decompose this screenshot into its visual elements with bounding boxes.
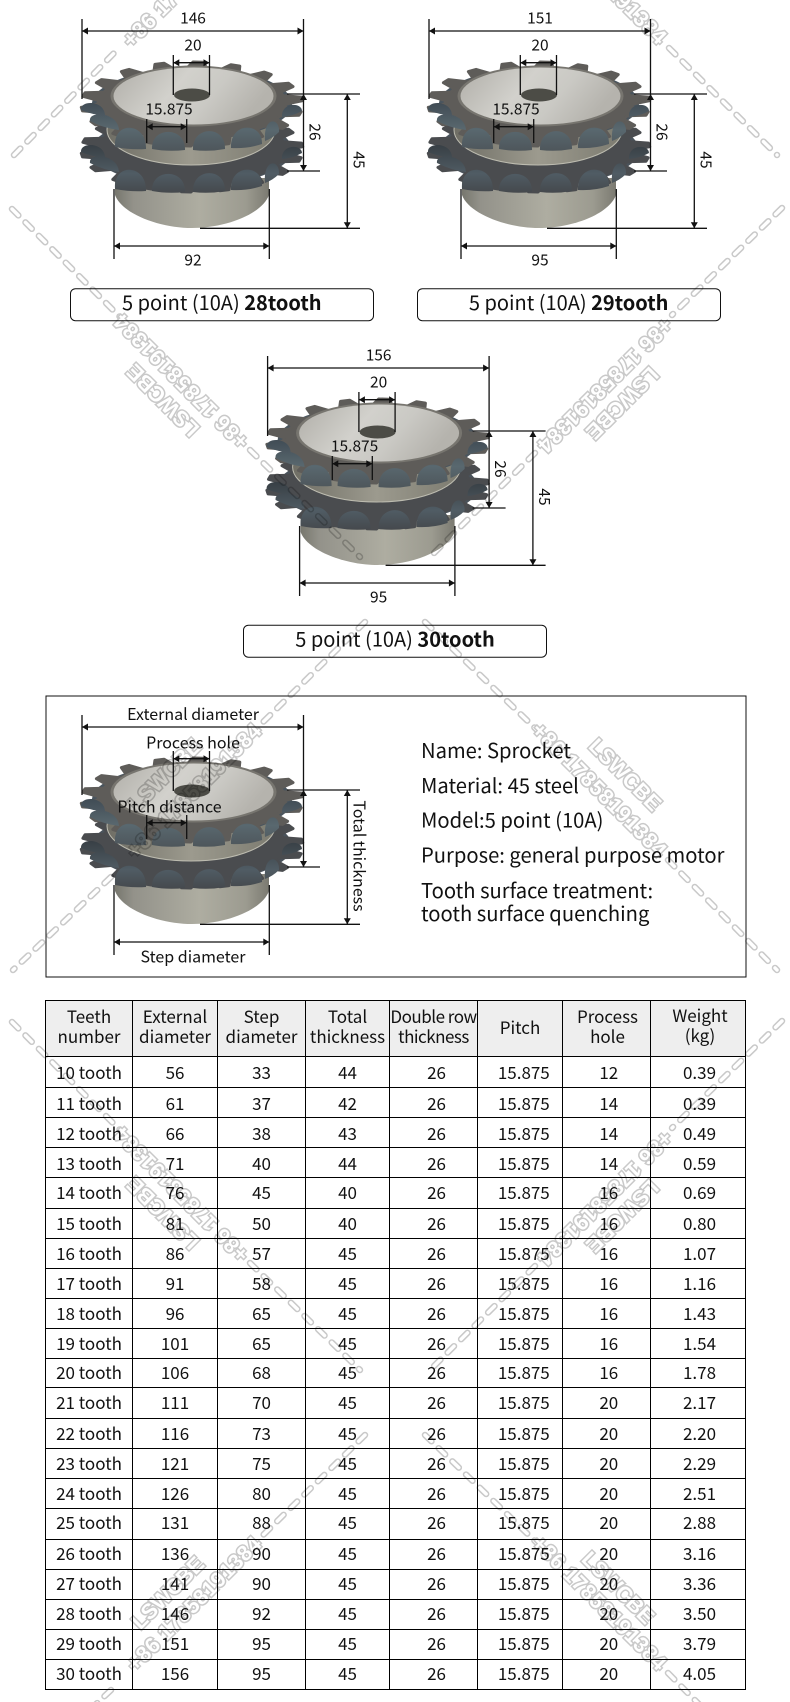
specification table: 26: [427, 1179, 446, 1204]
dimension lines 28 tooth: [82, 19, 360, 259]
dimension labels 29 tooth: [492, 6, 718, 271]
specification table: [45, 1000, 746, 1690]
sprocket photo 30 tooth: [267, 399, 488, 565]
specification table: 15.875: [498, 1240, 550, 1264]
specification table: 0.59: [683, 1150, 716, 1174]
specification table: 45: [338, 1420, 357, 1444]
watermark phone numbers: +86 17858191384: [122, 1532, 266, 1676]
specification table: 45: [338, 1630, 357, 1654]
specification table: 26: [427, 1150, 446, 1174]
specification table: 3.50: [683, 1600, 716, 1624]
sprocket photo 29 tooth: [428, 62, 650, 228]
specification table: 15.875: [498, 1540, 550, 1564]
specification table: 15 tooth: [56, 1210, 122, 1234]
watermark brand names: LSWCBE: [122, 359, 204, 441]
dimension lines: [82, 715, 360, 955]
dimension names: Step diameter: [141, 944, 246, 968]
specification table: 44: [338, 1150, 357, 1174]
specification table: 45: [338, 1660, 357, 1684]
caption: 29 tooth: 5 point (10A) 29tooth: [469, 287, 668, 316]
dimension names: Process hole: [146, 730, 240, 754]
specification table: 121: [161, 1450, 189, 1474]
specification table: 126: [161, 1480, 189, 1504]
dimension names: Pitch distance: [117, 794, 222, 818]
specification table: Weight: [672, 1002, 728, 1027]
specification table: 70: [252, 1389, 271, 1414]
specification table: 141: [161, 1570, 189, 1594]
watermark brand names: LSWCBE: [581, 1175, 663, 1257]
specification table: 20 tooth: [56, 1359, 122, 1384]
dimension labels 29 tooth: 26: [652, 123, 674, 141]
specification table: 20: [599, 1480, 618, 1504]
specification table: 18 tooth: [56, 1300, 122, 1324]
specification table: 26: [427, 1660, 446, 1684]
product attributes: Model:5 point (10A): [421, 805, 603, 834]
specification table: 45: [338, 1540, 357, 1564]
specification table: 25 tooth: [56, 1509, 122, 1534]
specification table: 15.875: [498, 1270, 550, 1294]
specification table: 20: [599, 1630, 618, 1654]
dimension labels 28 tooth: 45: [348, 151, 370, 169]
specification table: External: [143, 1003, 207, 1028]
watermark brand names: LSWCBE: [581, 362, 663, 444]
specification table: 65: [252, 1330, 271, 1354]
specification table: 0.39: [683, 1090, 716, 1114]
specification table: 45: [338, 1300, 357, 1324]
sprocket photo: [81, 758, 303, 924]
specification table: 96: [166, 1300, 184, 1324]
specification table: 14: [599, 1090, 618, 1114]
specification table: 3.16: [683, 1540, 716, 1564]
dimension labels 28 tooth: 20: [184, 34, 202, 56]
specification table: 45: [338, 1330, 357, 1354]
specification table: 26: [427, 1210, 446, 1234]
specification table: 45: [338, 1600, 357, 1624]
specification table: 20: [599, 1509, 618, 1534]
specification table: diameter: [139, 1023, 211, 1048]
specification table: 21 tooth: [56, 1389, 122, 1414]
specification table: 26: [427, 1540, 446, 1564]
specification table: 45: [338, 1359, 357, 1384]
dimension names: External diameter: [127, 701, 260, 725]
specification table: 71: [166, 1150, 184, 1174]
specification table: 58: [252, 1270, 271, 1294]
dimension lines 29 tooth: [429, 19, 707, 259]
specification table: 75: [252, 1450, 271, 1474]
specification table: 40: [338, 1179, 357, 1204]
specification table: 15.875: [498, 1630, 550, 1654]
specification table: 15.875: [498, 1300, 550, 1324]
dimension labels 28 tooth: [145, 6, 370, 271]
specification table: 90: [252, 1570, 271, 1594]
sprocket photo 28 tooth: [81, 62, 303, 228]
specification table: 95: [252, 1630, 271, 1654]
specification table: Process: [577, 1002, 638, 1028]
specification table: 15.875: [498, 1210, 550, 1234]
watermark phone numbers: +86 17858191384: [533, 313, 677, 457]
specification table: number: [58, 1023, 120, 1048]
watermark brand names: LSWCBE: [577, 1547, 659, 1629]
specification table: 44: [338, 1059, 357, 1084]
specification table: 15.875: [498, 1509, 550, 1534]
dimension labels 29 tooth: 151: [527, 6, 553, 28]
specification table: 1.16: [683, 1270, 716, 1294]
specification table: 22 tooth: [56, 1420, 122, 1444]
watermark brand names: [122, 359, 666, 1634]
dimension labels 30 tooth: 15.875: [331, 435, 378, 457]
specification table: 40: [338, 1210, 357, 1234]
watermark brand names: LSWCBE: [127, 1552, 209, 1634]
dimension labels 29 tooth: 15.875: [492, 98, 540, 120]
dimension labels 28 tooth: 146: [180, 6, 206, 28]
specification table: 20: [599, 1389, 618, 1414]
caption: 30 tooth: 5 point (10A) 30tooth: [295, 624, 495, 652]
specification table: 68: [252, 1359, 271, 1384]
specification table: 45: [252, 1179, 271, 1204]
specification table: 33: [252, 1059, 271, 1084]
specification table: Double row: [390, 1003, 477, 1028]
dimension names: Total thickness: [348, 800, 372, 912]
specification table: 20: [599, 1420, 618, 1444]
dimension labels 30 tooth: 45: [534, 488, 556, 506]
specification table: 26: [427, 1509, 446, 1534]
panel frame: [46, 696, 746, 977]
specification table: thickness: [398, 1023, 469, 1048]
specification table: 15.875: [498, 1090, 550, 1114]
specification table: 131: [161, 1509, 189, 1534]
specification table: 3.79: [683, 1630, 716, 1654]
specification table: 101: [161, 1330, 189, 1354]
watermark phone numbers: +86 17858191384: [109, 1122, 254, 1267]
drawing: 29 tooth sprocket: [428, 6, 718, 271]
specification table: 0.80: [683, 1210, 716, 1234]
specification table: 16: [599, 1300, 618, 1324]
specification table: Pitch: [500, 1014, 540, 1039]
specification table: 45: [338, 1570, 357, 1594]
specification table: 81: [166, 1210, 184, 1234]
specification table: 20: [599, 1600, 618, 1624]
caption: 30 tooth: [244, 624, 546, 657]
specification table: 16: [599, 1270, 618, 1294]
specification table: 26: [427, 1389, 446, 1414]
specification table: 26: [427, 1270, 446, 1294]
specification table: 26: [427, 1240, 446, 1264]
product attributes: tooth surface quenching: [421, 898, 650, 927]
specification table: 13 tooth: [56, 1150, 122, 1174]
specification table: 2.29: [683, 1450, 716, 1474]
specification table: 45: [338, 1389, 357, 1414]
specification table: 16: [599, 1240, 618, 1264]
specification table: 11 tooth: [56, 1090, 122, 1114]
specification table: 16: [599, 1330, 618, 1354]
specification table: 37: [252, 1090, 271, 1114]
specification table: 15.875: [498, 1330, 550, 1354]
dimension labels 30 tooth: 156: [366, 344, 392, 366]
specification table: 106: [161, 1359, 189, 1384]
specification table: 151: [161, 1630, 189, 1654]
product attributes: Purpose: general purpose motor: [421, 840, 725, 869]
specification table: 45: [338, 1450, 357, 1474]
dimension labels 28 tooth: 26: [304, 123, 326, 141]
specification table: 91: [166, 1270, 184, 1294]
specification table: 15.875: [498, 1150, 550, 1174]
specification table: 3.36: [683, 1570, 716, 1594]
specification table: 15.875: [498, 1660, 550, 1684]
specification table: 28 tooth: [56, 1600, 122, 1624]
specification table: 146: [161, 1600, 189, 1624]
specification table: 20: [599, 1450, 618, 1474]
specification table: 14: [599, 1120, 618, 1144]
specification table: diameter: [226, 1023, 297, 1048]
specification table: hole: [590, 1022, 625, 1048]
specification table: Total: [328, 1003, 367, 1028]
specification table: 2.20: [683, 1420, 716, 1444]
dimension labels 29 tooth: 95: [531, 249, 549, 271]
dimension labels 28 tooth: 15.875: [145, 98, 193, 120]
specification table: 76: [166, 1179, 184, 1204]
specification table: 15.875: [498, 1600, 550, 1624]
specification table: 30 tooth: [56, 1660, 122, 1684]
caption: 29 tooth: [418, 287, 720, 321]
panel: product specification: [46, 696, 746, 977]
caption: 28 tooth: [70, 287, 374, 321]
specification table: 66: [166, 1120, 184, 1144]
specification table: 2.17: [683, 1389, 716, 1414]
product attributes: [421, 735, 725, 927]
specification table: 88: [252, 1509, 271, 1534]
watermark brand names: LSWCBE: [122, 1172, 204, 1254]
specification table: thickness: [310, 1023, 385, 1048]
specification table: 73: [252, 1420, 271, 1444]
drawing: 30 tooth sprocket: [267, 344, 556, 608]
specification table: 45: [338, 1270, 357, 1294]
specification table: 15.875: [498, 1570, 550, 1594]
specification table: 2.88: [683, 1509, 716, 1534]
specification table: 16: [599, 1359, 618, 1384]
product attributes: Tooth surface treatment:: [421, 875, 653, 904]
specification table: (kg): [685, 1022, 715, 1047]
specification table: 2.51: [683, 1480, 716, 1504]
specification table: 10 tooth: [56, 1059, 122, 1084]
product artwork: sprockets, dimensions, captions and spec panel: [46, 6, 746, 978]
specification table: 26: [427, 1330, 446, 1354]
watermark phone numbers: +86 17858191384: [533, 1126, 677, 1270]
drawing: 28 tooth sprocket: [81, 6, 370, 271]
dimension labels 29 tooth: 20: [531, 34, 549, 56]
specification table: 90: [252, 1540, 271, 1564]
dimension labels 28 tooth: 92: [184, 249, 202, 271]
specification table: 20: [599, 1570, 618, 1594]
specification table: 50: [252, 1210, 271, 1234]
specification table: 26: [427, 1059, 446, 1084]
specification table: 27 tooth: [56, 1570, 122, 1594]
specification table: 20: [599, 1540, 618, 1564]
watermark phone numbers: +86 17858191384: [527, 718, 671, 862]
specification table: 15.875: [498, 1450, 550, 1474]
specification table: 14: [599, 1150, 618, 1174]
dimension labels 30 tooth: 20: [370, 371, 387, 393]
specification table: 23 tooth: [56, 1450, 122, 1474]
specification table: 80: [252, 1480, 271, 1504]
specification table: 15.875: [498, 1120, 550, 1144]
specification table: 16: [599, 1179, 618, 1204]
annotated sprocket diagram: [81, 701, 372, 968]
specification table: 45: [338, 1509, 357, 1534]
specification table: 14 tooth: [56, 1179, 122, 1204]
specification table: 20: [599, 1660, 618, 1684]
watermark phone numbers: [109, 0, 677, 1676]
specification table: 1.78: [683, 1359, 716, 1384]
specification table: 26: [427, 1300, 446, 1324]
specification table: 26: [427, 1450, 446, 1474]
dimension labels 30 tooth: 26: [490, 460, 512, 478]
specification table: 26: [427, 1120, 446, 1144]
specification table: 0.39: [683, 1059, 716, 1084]
specification table: 16 tooth: [56, 1240, 122, 1264]
specification table: 156: [161, 1660, 189, 1684]
specification table: 1.43: [683, 1300, 716, 1324]
specification table: 0.69: [683, 1179, 716, 1204]
specification table: 16: [599, 1210, 618, 1234]
watermark phone numbers: +86 17858191384: [122, 719, 266, 863]
specification table: 12 tooth: [56, 1120, 122, 1144]
specification table: 17 tooth: [56, 1270, 122, 1294]
watermark brand names: LSWCBE: [584, 734, 666, 816]
specification table: 26: [427, 1420, 446, 1444]
specification table: 29 tooth: [56, 1630, 122, 1654]
specification table: 95: [252, 1660, 271, 1684]
specification table: 65: [252, 1300, 271, 1324]
specification table: 40: [252, 1150, 271, 1174]
specification table: 38: [252, 1120, 271, 1144]
specification table: 26 tooth: [56, 1540, 122, 1564]
dimension labels 29 tooth: 45: [696, 151, 718, 169]
specification table: 26: [427, 1090, 446, 1114]
specification table: 15.875: [498, 1359, 550, 1384]
specification table: 1.07: [683, 1240, 716, 1264]
specification table: 116: [161, 1420, 189, 1444]
specification table: 12: [599, 1059, 618, 1084]
specification table: 56: [166, 1059, 184, 1084]
specification table: 61: [166, 1090, 184, 1114]
product attributes: Material: 45 steel: [421, 770, 579, 799]
specification table: 86: [166, 1240, 184, 1264]
product attributes: Name: Sprocket: [421, 735, 571, 764]
specification table: 26: [427, 1570, 446, 1594]
dimension lines 30 tooth: [268, 356, 546, 596]
specification table: 24 tooth: [56, 1480, 122, 1504]
specification table: 26: [427, 1600, 446, 1624]
specification table: 26: [427, 1480, 446, 1504]
specification table: 45: [338, 1240, 357, 1264]
specification table: 19 tooth: [56, 1330, 122, 1354]
specification table: 0.49: [683, 1120, 716, 1144]
specification table: 42: [338, 1090, 357, 1114]
specification table: 15.875: [498, 1389, 550, 1414]
specification table: 1.54: [683, 1330, 716, 1354]
specification table: 15.875: [498, 1420, 550, 1444]
specification table: 43: [338, 1120, 357, 1144]
specification table: 15.875: [498, 1059, 550, 1084]
specification table: 111: [161, 1389, 189, 1414]
specification table: 15.875: [498, 1480, 550, 1504]
specification table: 45: [338, 1480, 357, 1504]
specification table: 57: [252, 1240, 271, 1264]
specification table: Step: [244, 1003, 279, 1028]
watermark phone numbers: +86 17858191384: [109, 309, 254, 454]
specification table: 136: [161, 1540, 189, 1564]
caption: 28 tooth: 5 point (10A) 28tooth: [122, 287, 322, 316]
specification table: Teeth: [67, 1003, 111, 1028]
specification table: 26: [427, 1630, 446, 1654]
specification table: 26: [427, 1359, 446, 1384]
watermark brand names: LSWCBE: [124, 734, 206, 816]
specification table: 15.875: [498, 1179, 550, 1204]
watermark phone numbers: +86 17858191384: [527, 1531, 671, 1675]
specification table: 4.05: [683, 1660, 716, 1684]
specification table: 92: [252, 1600, 271, 1624]
dimension labels 30 tooth: [331, 344, 556, 608]
dimension names: [117, 701, 372, 968]
dimension labels 30 tooth: 95: [370, 586, 387, 608]
